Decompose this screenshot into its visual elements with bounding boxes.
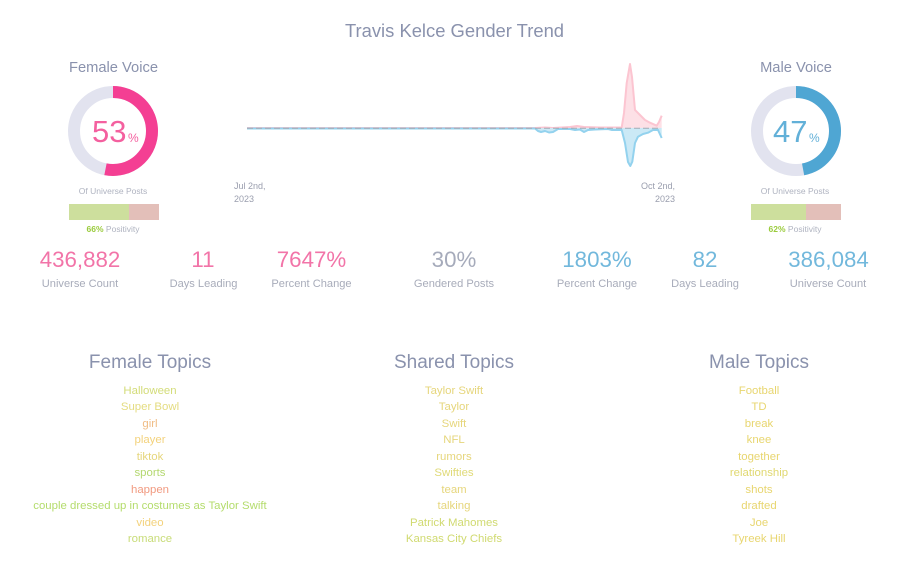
panel: male voice [751,60,841,234]
positivity bar [751,204,841,220]
topic list: shared: Taylor [439,401,469,413]
topic list: male [730,385,788,545]
date label: start: Jul 2nd, [234,181,266,191]
topic list: shared: team [441,484,467,496]
title: Travis Kelce Gender Trend [345,20,564,41]
topic list: male: break [745,418,773,430]
heading: shared topics: Shared Topics [394,352,514,372]
stat: female percent change: Percent Change [271,278,352,290]
topic list: shared: Kansas City Chiefs [406,533,502,545]
topic list: female: player [134,434,166,446]
stat: gendered posts [414,246,494,290]
topic list: male: Tyreek Hill [732,533,786,545]
stat: female percent change [271,246,352,290]
topic list: shared [406,385,502,545]
panel: female voice [68,60,159,234]
stat: male percent change: 1803% [562,246,632,272]
donut: male 47%: 47% [773,114,820,149]
label: positivity: 66% Positivity [87,224,139,234]
topic list: female [33,385,267,545]
stat: male days leading [671,246,739,290]
positivity bar [68,204,158,220]
topic list: female: girl [142,418,158,430]
panel: female topics [33,352,267,545]
topic list: male: knee [747,434,771,446]
heading: male voice: Male Voice [760,60,832,76]
panel: shared topics [394,352,514,545]
topic list: female: romance [128,533,172,545]
female area [247,64,662,128]
topic list: shared: NFL [443,434,465,446]
topic list: female: video [136,517,164,529]
topic list: shared: Taylor Swift [425,385,483,397]
date label: end: 2023 [655,194,675,204]
topic list: female: happen [131,484,169,496]
stat: female days leading: Days Leading [170,278,237,290]
date label: end: Oct 2nd, [641,181,675,191]
stat: male percent change: Percent Change [557,278,637,290]
topic list: male: relationship [730,467,788,479]
donut: male 47% [751,86,841,176]
topic list: female: tiktok [137,451,163,463]
stat: female universe count: 436,882 [40,246,120,272]
stat: gendered posts: Gendered Posts [414,278,494,290]
topic list: shared: Swifties [434,467,474,479]
stat: male days leading: 82 [693,246,717,272]
stat: male days leading: Days Leading [671,278,739,290]
stat: male universe count [788,246,869,290]
heading: male topics: Male Topics [709,352,809,372]
topic list: male: together [738,451,780,463]
stat: gendered posts: 30% [432,246,476,272]
topic list: shared: Patrick Mahomes [410,517,498,529]
donut: female 53% [68,86,158,176]
stat: male universe count: 386,084 [788,246,869,272]
stat: male percent change [557,246,637,290]
topic list: male: shots [745,484,773,496]
stat: female percent change: 7647% [277,246,346,272]
topic list: male: drafted [741,500,777,512]
topic list: female: sports [134,467,166,479]
topic list: shared: rumors [436,451,472,463]
stat: male universe count: Universe Count [790,278,866,290]
topic list: female: Halloween [123,385,177,397]
stat: female days leading [170,246,237,290]
panel: male topics [709,352,809,545]
topic list: shared: Swift [442,418,466,430]
topic list: female: couple dressed up in costumes as Taylor Swift [33,500,267,512]
topic list: female: Super Bowl [121,401,179,413]
label: of universe posts: Of Universe Posts [761,186,829,196]
chart: gender trend [234,63,675,204]
topic list: male: Football [739,385,779,397]
heading: female topics: Female Topics [89,352,211,372]
label: of universe posts: Of Universe Posts [79,186,147,196]
male area [247,128,662,166]
heading: female voice: Female Voice [69,60,158,76]
stat: female days leading: 11 [191,246,215,272]
stat: female universe count: Universe Count [42,278,118,290]
topic list: male: Joe [750,517,768,529]
date label: start: 2023 [234,194,254,204]
topic list: shared: talking [438,500,470,512]
topic list: male: TD [751,401,767,413]
stat: female universe count [40,246,120,290]
label: positivity: 62% Positivity [769,224,821,234]
donut: female 53%: 53% [92,114,139,149]
